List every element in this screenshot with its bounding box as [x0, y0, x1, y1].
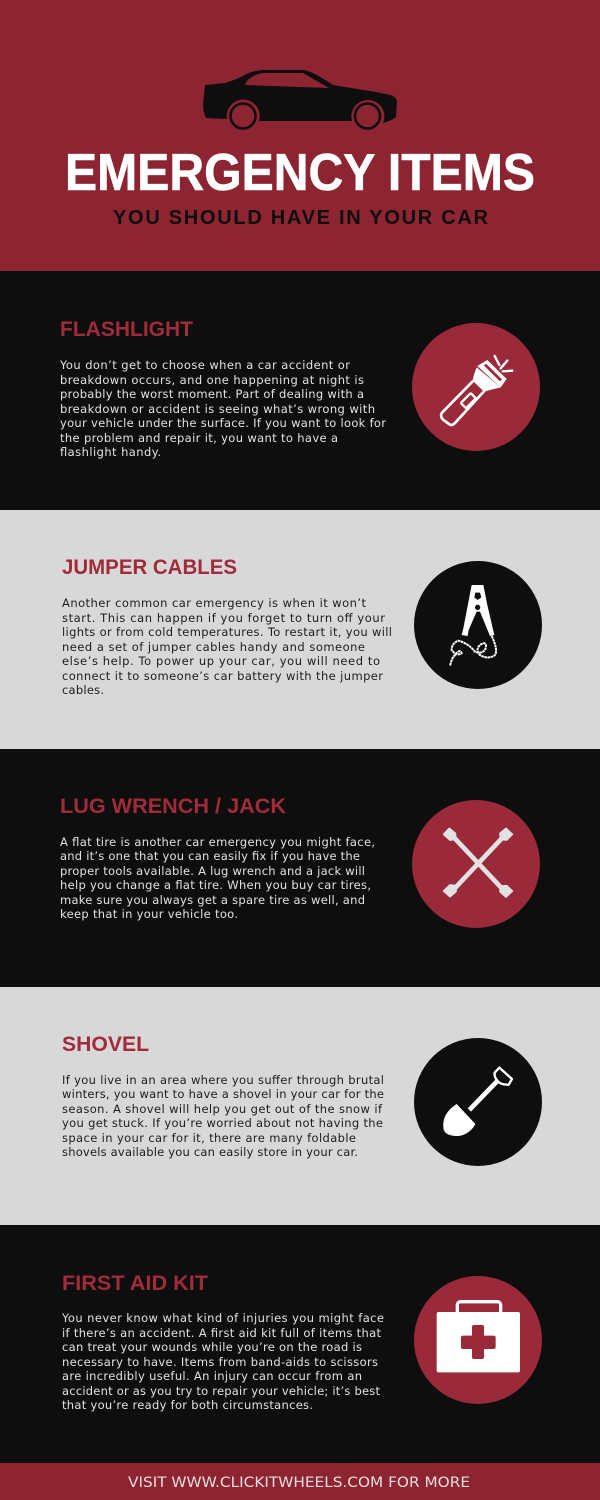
text block: flashlight: your vehicle under the surface. If you want to look for — [60, 416, 386, 430]
heading: lug wrench and jack: LUG WRENCH / JACK — [60, 795, 286, 818]
text block: lug wrench and jack: proper tools available. A lug wrench and a jack will — [60, 864, 365, 878]
title: EMERGENCY ITEMS — [65, 144, 535, 202]
panel: lug wrench and jack — [0, 749, 600, 987]
icon: first aid kit — [414, 1276, 542, 1404]
footer text: VISIT WWW.CLICKITWHEELS.COM FOR MORE — [128, 1475, 470, 1491]
text block: first aid kit — [61, 1311, 384, 1412]
text block: shovel: season. A shovel will help you get out of the snow if — [62, 1102, 383, 1116]
text block: lug wrench and jack: keep that in your vehicle too. — [60, 907, 238, 921]
icon: car — [203, 70, 397, 128]
text block: jumper cables: connect it to someone’s car battery with the jumper — [62, 669, 383, 683]
panel: first aid kit — [0, 1225, 600, 1463]
text block: flashlight: breakdown or accident is seeing what’s wrong with — [60, 402, 375, 416]
panel: header — [0, 0, 600, 271]
text block: shovel: winters, you want to have a shovel in your car for the — [62, 1087, 384, 1101]
icon: jumper cables — [414, 561, 542, 689]
text block: lug wrench and jack — [60, 835, 375, 921]
heading: shovel: SHOVEL — [62, 1033, 149, 1056]
text block: flashlight: You don’t get to choose when a car accident or — [59, 358, 350, 372]
text block: lug wrench and jack: and it’s one that you can easily fix if you have the — [60, 849, 360, 863]
text block: first aid kit: that you’re ready for both circumstances. — [62, 1398, 313, 1412]
text block: first aid kit: can treat your wounds while you’re on the road is — [62, 1340, 362, 1354]
icon: lug wrench — [412, 800, 540, 928]
text block: jumper cables: cables. — [62, 683, 104, 697]
text block: first aid kit: are incredibly useful. An injury can occur from an — [62, 1369, 362, 1383]
panel: flashlight — [0, 271, 600, 510]
text block: first aid kit: necessary to have. Items from band-aids to scissors — [62, 1355, 378, 1369]
text block: first aid kit: if there’s an accident. A first aid kit full of items that — [62, 1326, 381, 1340]
text block: lug wrench and jack: A flat tire is another car emergency you might face, — [60, 835, 375, 849]
text block: jumper cables: lights or from cold temperatures. To restart it, you will — [62, 625, 392, 639]
text block: lug wrench and jack: help you change a flat tire. When you buy car tires, — [60, 878, 371, 892]
icon: flashlight — [412, 323, 540, 451]
icon: shovel — [414, 1038, 542, 1166]
text block: flashlight: flashlight handy. — [60, 445, 161, 459]
panel: shovel — [0, 987, 600, 1225]
text block: flashlight: the problem and repair it, you want to have a — [60, 431, 338, 445]
text block: shovel: space in your car for it, there are many foldable — [62, 1131, 356, 1145]
panel: footer — [0, 1463, 600, 1500]
text block: shovel: shovels available you can easily store in your car. — [62, 1145, 358, 1159]
text block: jumper cables: else’s help. To power up your car, you will need to — [62, 654, 380, 668]
text block: shovel — [62, 1073, 384, 1159]
text block: first aid kit: accident or as you try to repair your vehicle; it’s best — [62, 1384, 380, 1398]
text block: flashlight — [59, 358, 386, 459]
panel: jumper cables — [0, 510, 600, 749]
heading: jumper cables: JUMPER CABLES — [62, 556, 237, 579]
text block: jumper cables: need a set of jumper cables handy and someone — [62, 640, 365, 654]
heading: flashlight: FLASHLIGHT — [60, 318, 193, 341]
subtitle: YOU SHOULD HAVE IN YOUR CAR — [113, 207, 489, 229]
text block: first aid kit: You never know what kind of injuries you might face — [61, 1311, 384, 1325]
text block: jumper cables: Another common car emergency is when it won’t — [62, 596, 366, 610]
text block: flashlight: probably the worst moment. Part of dealing with a — [60, 387, 364, 401]
text block: jumper cables: start. This can happen if you forget to turn off your — [62, 611, 385, 625]
heading: first aid kit: FIRST AID KIT — [62, 1272, 208, 1295]
text block: jumper cables — [62, 596, 392, 697]
text block: shovel: If you live in an area where you suffer through brutal — [62, 1073, 384, 1087]
text block: shovel: you get stuck. If you’re worried about not having the — [62, 1116, 383, 1130]
text block: lug wrench and jack: make sure you always get a spare tire as well, and — [60, 893, 365, 907]
text block: flashlight: breakdown occurs, and one happening at night is — [60, 373, 364, 387]
